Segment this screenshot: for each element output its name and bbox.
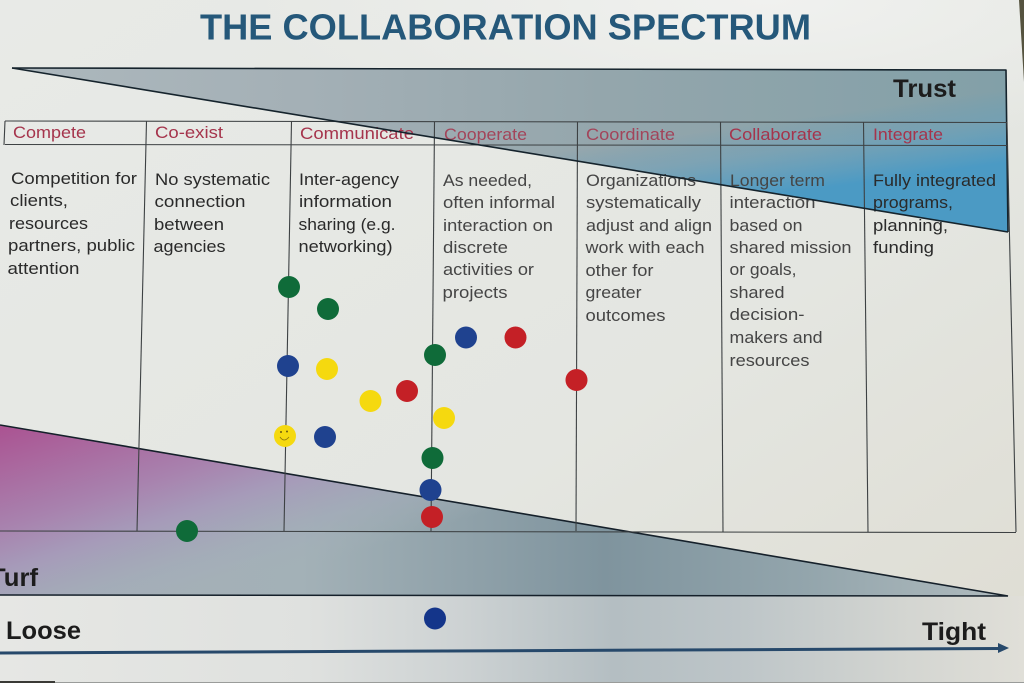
description: Co-exist: connection — [154, 192, 246, 211]
dot: green — [422, 447, 444, 469]
description: Compete: partners, public — [8, 236, 136, 255]
description: Co-exist — [154, 170, 271, 256]
dot: yellow smiley — [274, 425, 296, 447]
description: Cooperate: interaction on — [443, 216, 553, 235]
column: Coordinate — [584, 126, 712, 325]
description: Cooperate: As needed, — [443, 171, 532, 190]
dot: green — [317, 298, 339, 320]
description: Coordinate: Organizations — [586, 171, 696, 190]
description: Collaborate: makers and — [730, 328, 822, 347]
dot: blue — [424, 608, 446, 630]
description: Collaborate: or goals, — [730, 260, 796, 279]
description: Collaborate: decision- — [730, 305, 804, 324]
description: Collaborate: based on — [730, 216, 802, 235]
dot: red — [566, 369, 588, 391]
description: Coordinate: work with each — [584, 238, 704, 257]
description: Coordinate: systematically — [586, 193, 702, 212]
heading: Cooperate: Cooperate — [444, 126, 527, 144]
description: Compete: attention — [8, 259, 80, 278]
arrow: loose to tight — [0, 643, 1009, 653]
description: Integrate: Fully integrated — [873, 171, 996, 190]
description: Integrate: funding — [873, 238, 934, 257]
description: Integrate: programs, — [873, 193, 953, 212]
description: Cooperate: projects — [442, 283, 508, 302]
description: Coordinate: outcomes — [586, 306, 666, 325]
description: Cooperate: discrete — [443, 238, 508, 257]
description: Coordinate — [584, 171, 712, 325]
heading: Compete: Compete — [13, 124, 86, 142]
dot: green — [424, 344, 446, 366]
description: Compete: clients, — [10, 191, 68, 210]
voting dots — [176, 276, 588, 630]
heading: Communicate: Communicate — [300, 125, 414, 143]
column: Communicate — [298, 125, 414, 256]
dot: green — [176, 520, 198, 542]
heading: Coordinate: Coordinate — [586, 126, 675, 144]
dot: blue — [455, 326, 477, 348]
description: Communicate: information — [299, 192, 392, 211]
dot: red — [504, 326, 526, 348]
dot: yellow — [360, 390, 382, 412]
trust wedge — [12, 68, 1008, 232]
column: Co-exist — [154, 124, 271, 256]
description: Co-exist: No systematic — [155, 170, 271, 189]
description: Collaborate: shared mission — [730, 238, 852, 257]
description: Collaborate: resources — [730, 351, 810, 370]
description: Communicate: Inter-agency — [299, 170, 400, 189]
description: Communicate: networking) — [298, 237, 392, 256]
dot: red — [421, 506, 443, 528]
description: Co-exist: agencies — [154, 237, 226, 256]
dot: blue — [314, 426, 336, 448]
heading: Co-exist: Co-exist — [155, 124, 223, 142]
description: Coordinate: other for — [586, 261, 654, 280]
description: Integrate — [873, 171, 996, 257]
dot: yellow — [433, 407, 455, 429]
column: Collaborate — [729, 126, 852, 370]
column: Cooperate — [442, 126, 555, 302]
description: Compete: Competition for — [11, 169, 137, 188]
description: Integrate: planning, — [873, 216, 948, 235]
description: Communicate — [298, 170, 400, 256]
heading: Collaborate: Collaborate — [729, 126, 822, 144]
dot: blue — [420, 479, 442, 501]
description: Compete — [8, 169, 137, 278]
label: Trust: Trust — [893, 75, 957, 103]
spectrum table grid — [0, 121, 1016, 532]
description: Collaborate: interaction — [730, 193, 816, 212]
label: Loose: Loose — [6, 617, 81, 645]
description: Collaborate: shared — [730, 283, 784, 302]
description: Collaborate — [730, 171, 852, 370]
label: Tight: Tight — [922, 618, 987, 646]
dot: red — [396, 380, 418, 402]
description: Communicate: sharing (e.g. — [298, 215, 396, 234]
description: Cooperate — [442, 171, 555, 302]
dot: green — [278, 276, 300, 298]
column: Integrate — [873, 126, 996, 257]
heading: Integrate: Integrate — [873, 126, 943, 144]
description: Collaborate: Longer term — [730, 171, 825, 190]
description: Co-exist: between — [154, 215, 224, 234]
title: THE COLLABORATION SPECTRUM — [200, 6, 811, 48]
dot: yellow — [316, 358, 338, 380]
column: Compete — [8, 124, 137, 278]
description: Coordinate: greater — [586, 283, 642, 302]
description: Compete: resources — [9, 214, 88, 233]
description: Coordinate: adjust and align — [586, 216, 712, 235]
description: Cooperate: activities or — [443, 260, 534, 279]
dot: blue — [277, 355, 299, 377]
turf wedge — [0, 425, 1008, 596]
description: Cooperate: often informal — [443, 193, 555, 212]
